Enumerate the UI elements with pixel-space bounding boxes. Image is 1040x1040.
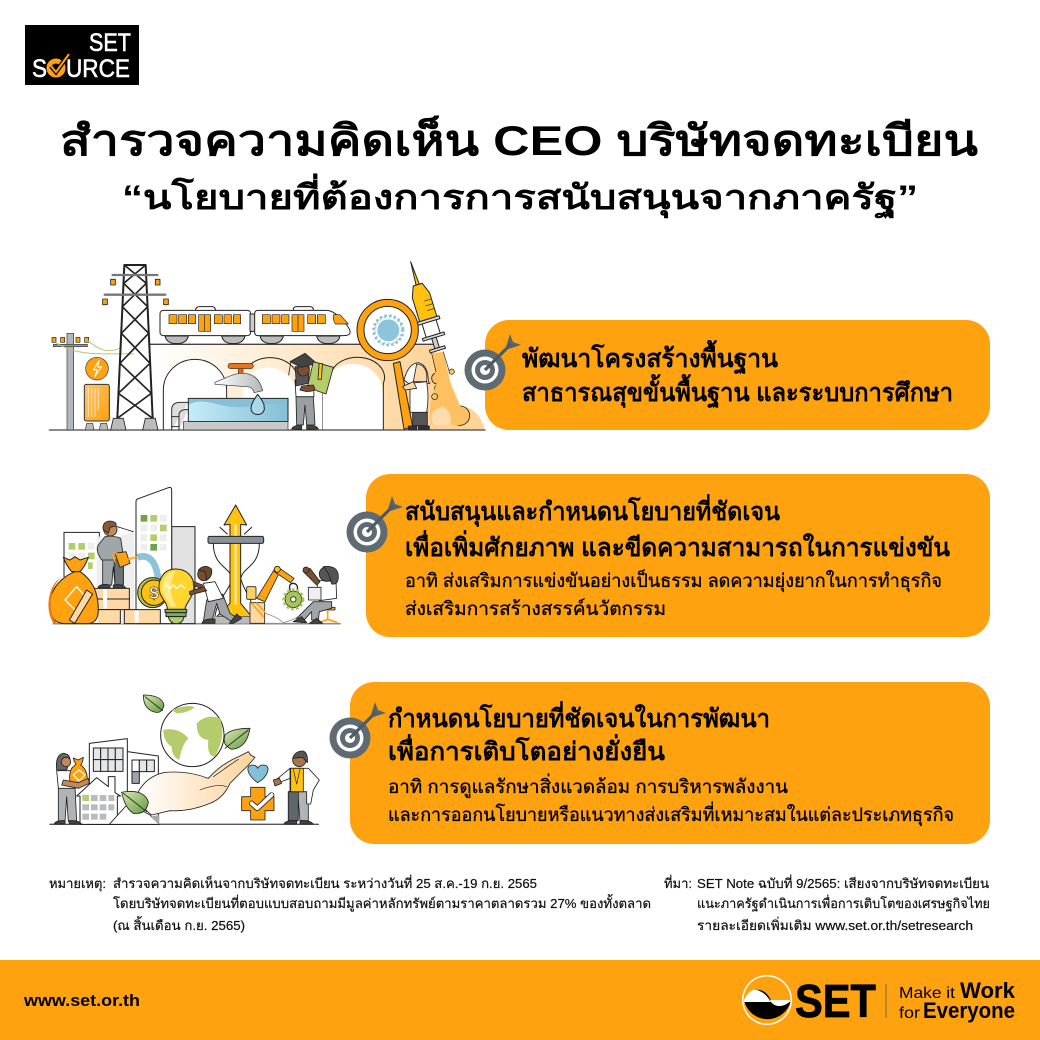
body text: competitiveness bbox=[405, 568, 942, 620]
student with book bbox=[289, 353, 333, 429]
footnote: remarks bbox=[49, 874, 651, 933]
footer band bbox=[0, 960, 1040, 1040]
seated woman bbox=[293, 566, 338, 623]
doctor bbox=[273, 751, 319, 824]
syringe bbox=[400, 258, 449, 354]
illustration: infrastructure, health and education bbox=[49, 258, 485, 430]
water stream bbox=[137, 556, 158, 580]
heading: infrastructure: สาธารณสุขขั้นพื้นฐาน และระบบการศึกษา bbox=[522, 373, 953, 409]
tagline: for bbox=[899, 1005, 921, 1022]
buildings bbox=[89, 739, 158, 824]
subtitle: “นโยบายที่ต้องการการสนับสนุนจากภาครัฐ” bbox=[122, 173, 918, 220]
faucet bbox=[215, 363, 264, 415]
icon: target bbox=[346, 496, 403, 552]
ground line bbox=[49, 428, 485, 432]
footnote: remarks: โดยบริษัทจดทะเบียนที่ตอบแบบสอบถามมีมูลค่าหลักทรัพย์ตามราคาตลาดรวม 27% ของทั้งตลาด bbox=[113, 894, 651, 912]
footnote: remarks: (ณ สิ้นเดือน ก.ย. 2565) bbox=[113, 916, 245, 933]
light bulb bbox=[159, 569, 194, 624]
body text: sustainability: และการออกนโยบายหรือแนวทางส่งเสริมที่เหมาะสมในแต่ละประเภทธุรกิจ bbox=[388, 801, 954, 827]
buildings bbox=[64, 487, 195, 624]
body text: sustainability: อาทิ การดูแลรักษาสิ่งแวดล้อม การบริหารพลังงาน bbox=[388, 773, 788, 798]
energy badge bbox=[86, 357, 108, 380]
leaf: top bbox=[143, 695, 164, 712]
source badge: SET bbox=[89, 29, 131, 57]
hand bbox=[109, 752, 255, 824]
leaf: bottom bbox=[122, 791, 148, 814]
SET logo: SET bbox=[795, 975, 876, 1027]
website: www.set.or.th bbox=[23, 991, 140, 1010]
magnifier with virus bbox=[357, 299, 418, 429]
viaduct bbox=[150, 344, 433, 430]
scientist bbox=[403, 363, 430, 429]
heading: competitiveness bbox=[405, 494, 950, 562]
body text: competitiveness: อาทิ ส่งเสริมการแข่งขันอย่างเป็นธรรม ลดความยุ่งยากในการทำธุรกิจ bbox=[405, 568, 942, 593]
title: สำรวจความคิดเห็น CEO บริษัทจดทะเบียน bbox=[60, 115, 978, 164]
man pushing bulb bbox=[189, 566, 242, 623]
icon: target bbox=[464, 334, 521, 390]
body text: sustainability bbox=[388, 773, 954, 827]
footnote: source: ที่มา: bbox=[664, 875, 692, 891]
hourglass and arrow bbox=[205, 505, 264, 623]
source badge bbox=[25, 25, 139, 85]
water tank bbox=[171, 398, 288, 430]
medical cross bbox=[242, 787, 274, 820]
tagline: Make it bbox=[899, 985, 956, 1002]
battery bbox=[84, 384, 109, 430]
coin stacks bbox=[84, 588, 160, 624]
heading: sustainability bbox=[388, 701, 770, 766]
house calendar bbox=[77, 777, 121, 824]
heading: sustainability: เพื่อการเติบโตอย่างยั่งยืน bbox=[388, 734, 665, 766]
SET logo bbox=[742, 975, 886, 1027]
panel: infrastructure bbox=[464, 320, 990, 430]
body text: competitiveness: ส่งเสริมการสร้างสรรค์นวัตกรรม bbox=[405, 598, 666, 620]
source badge: S bbox=[32, 55, 47, 83]
source badge: URCE bbox=[66, 55, 130, 83]
globe bbox=[161, 703, 224, 767]
footnote: source: แนะภาครัฐดำเนินการเพื่อการเติบโตของเศรษฐกิจไทย bbox=[697, 895, 990, 912]
woman with money bag bbox=[54, 753, 89, 824]
heading: infrastructure: พัฒนาโครงสร้างพื้นฐาน bbox=[522, 339, 778, 375]
footnote: source: รายละเอียดเพิ่มเติม www.set.or.th/setresearch bbox=[697, 917, 973, 933]
money bag bbox=[48, 557, 98, 624]
tagline: Work bbox=[960, 978, 1016, 1003]
heading: infrastructure bbox=[522, 339, 953, 409]
peach ground glow bbox=[383, 344, 485, 430]
illustration: sustainability bbox=[50, 695, 319, 824]
transmission tower bbox=[103, 265, 168, 430]
panel: sustainability bbox=[330, 682, 990, 844]
illustration: business, policy and competitiveness bbox=[48, 487, 340, 624]
coin: $ bbox=[149, 583, 159, 602]
footnote: remarks: สำรวจความคิดเห็นจากบริษัทจดทะเบียน ระหว่างวันที่ 25 ส.ค.-19 ก.ย. 2565 bbox=[113, 874, 537, 891]
footnote: source bbox=[664, 875, 990, 933]
train bbox=[160, 307, 350, 344]
rocket smoke bbox=[430, 352, 470, 425]
leaf: right bbox=[224, 728, 250, 749]
ground bbox=[53, 621, 340, 626]
tagline: Everyone bbox=[923, 998, 1015, 1023]
footnote: remarks: หมายเหตุ: bbox=[49, 876, 106, 892]
heading: competitiveness: สนับสนุนและกำหนดนโยบายที่ชัดเจน bbox=[405, 494, 780, 528]
footnote: source: SET Note ฉบับที่ 9/2565: เสียงจากบริษัทจดทะเบียน bbox=[697, 875, 989, 891]
man with watering can bbox=[97, 521, 137, 588]
heading: competitiveness: เพื่อเพิ่มศักยภาพ และขีดความสามารถในการแข่งขัน bbox=[405, 530, 950, 562]
robot arm with gear bbox=[247, 566, 303, 623]
heading: sustainability: กำหนดนโยบายที่ชัดเจนในการพัฒนา bbox=[388, 701, 770, 733]
panel: policy and competitiveness bbox=[346, 474, 990, 637]
tagline bbox=[899, 978, 1016, 1023]
heart bbox=[248, 765, 268, 783]
icon: target bbox=[330, 702, 386, 758]
utility pole bbox=[52, 333, 133, 430]
coin bbox=[138, 578, 168, 608]
ground bbox=[50, 822, 318, 826]
